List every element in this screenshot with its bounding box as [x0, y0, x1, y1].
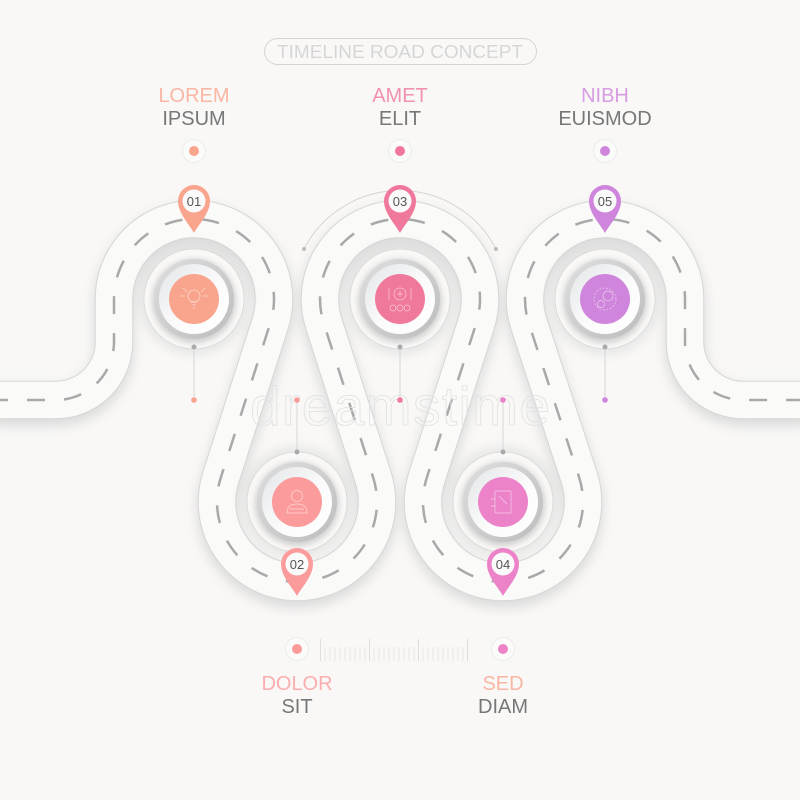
pin 01: 01 — [187, 194, 201, 209]
label: dolor sit: SIT — [281, 696, 313, 718]
marker dot 02 — [286, 638, 308, 660]
road — [0, 219, 800, 588]
label: nibh euismod: NIBH — [581, 85, 629, 107]
pin 01 — [178, 185, 210, 233]
step 05 hub — [549, 243, 661, 355]
step 01 hub — [138, 243, 250, 355]
marker dot 01 — [182, 140, 206, 162]
step 03 hub — [344, 243, 456, 355]
marker dot 04 — [492, 638, 514, 660]
pin 03: 03 — [393, 194, 407, 209]
step 02 hub — [241, 446, 353, 558]
watermark: dreamstime — [250, 375, 550, 437]
pin 05 — [589, 185, 621, 233]
title pill: TIMELINE ROAD CONCEPT — [277, 42, 523, 62]
pin 04 — [487, 548, 519, 596]
icon: light bulb — [180, 288, 208, 309]
pin 02: 02 — [290, 557, 304, 572]
marker dot 03 — [388, 140, 412, 162]
label: sed diam — [478, 673, 528, 718]
pin 03 — [384, 185, 416, 233]
pin 05: 05 — [598, 194, 612, 209]
icon: person — [287, 490, 307, 513]
label: nibh euismod: EUISMOD — [558, 108, 652, 130]
label: lorem ipsum — [158, 85, 230, 130]
label: amet elit — [372, 85, 428, 130]
connector stems — [191, 344, 608, 454]
icon: tablet — [491, 491, 511, 513]
label: amet elit: AMET — [372, 85, 428, 107]
label: amet elit: ELIT — [379, 108, 421, 130]
label: lorem ipsum: LOREM — [158, 85, 230, 107]
label: nibh euismod — [558, 85, 652, 130]
arc above step 03 — [302, 190, 498, 251]
pin 04: 04 — [496, 557, 510, 572]
marker dot 05 — [594, 140, 616, 162]
label: dolor sit: DOLOR — [261, 673, 333, 695]
label: sed diam: SED — [482, 673, 524, 695]
icon: gears — [594, 288, 616, 310]
title pill — [264, 38, 536, 64]
label: dolor sit — [261, 673, 333, 718]
ruler scale — [320, 639, 468, 661]
pin 02 — [281, 548, 313, 596]
icon: medical — [389, 288, 411, 311]
step 04 hub — [447, 446, 559, 558]
label: sed diam: DIAM — [478, 696, 528, 718]
label: lorem ipsum: IPSUM — [162, 108, 226, 130]
